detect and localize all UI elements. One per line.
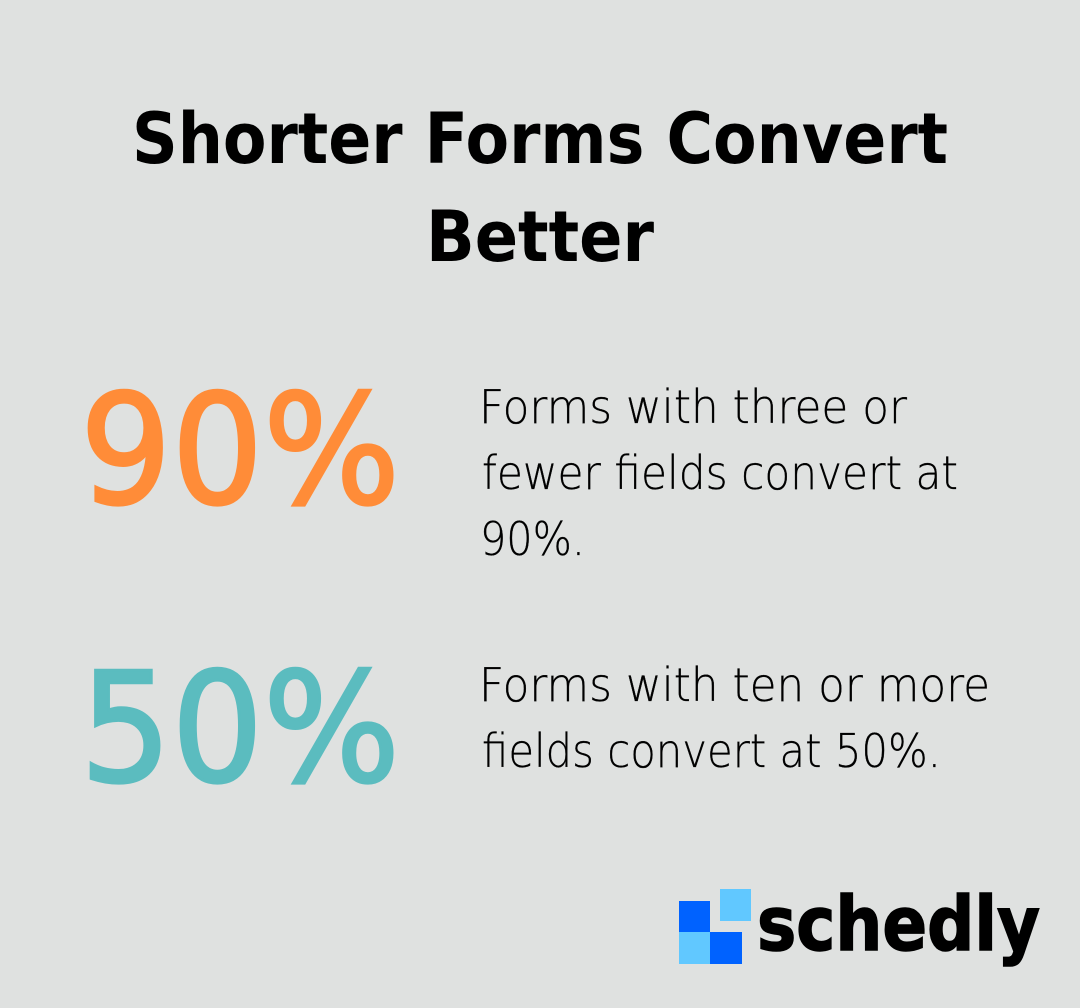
stat description: three or fewer fields: 90%.	[480, 512, 585, 566]
title: Shorter Forms Convert	[132, 98, 948, 180]
stat: 90%	[80, 362, 958, 566]
logo: schedly	[679, 880, 1040, 968]
logo wordmark: schedly	[757, 880, 1040, 968]
stat value: 90%: 90%	[80, 362, 400, 539]
icon: logo squares	[679, 889, 751, 964]
stat description: three or fewer fields: Forms with three or	[479, 380, 907, 434]
stat description: three or fewer fields	[479, 380, 958, 566]
stat description: ten or more fields: Forms with ten or more	[479, 658, 990, 712]
stat value: 50%: 50%	[80, 640, 400, 817]
stat description: three or fewer fields: fewer fields convert at	[482, 446, 958, 500]
stat description: ten or more fields	[479, 658, 990, 778]
stat: 50%	[80, 640, 990, 817]
stat description: ten or more fields: fields convert at 50%.	[482, 724, 941, 778]
title	[132, 98, 948, 278]
title: Better	[426, 196, 654, 278]
